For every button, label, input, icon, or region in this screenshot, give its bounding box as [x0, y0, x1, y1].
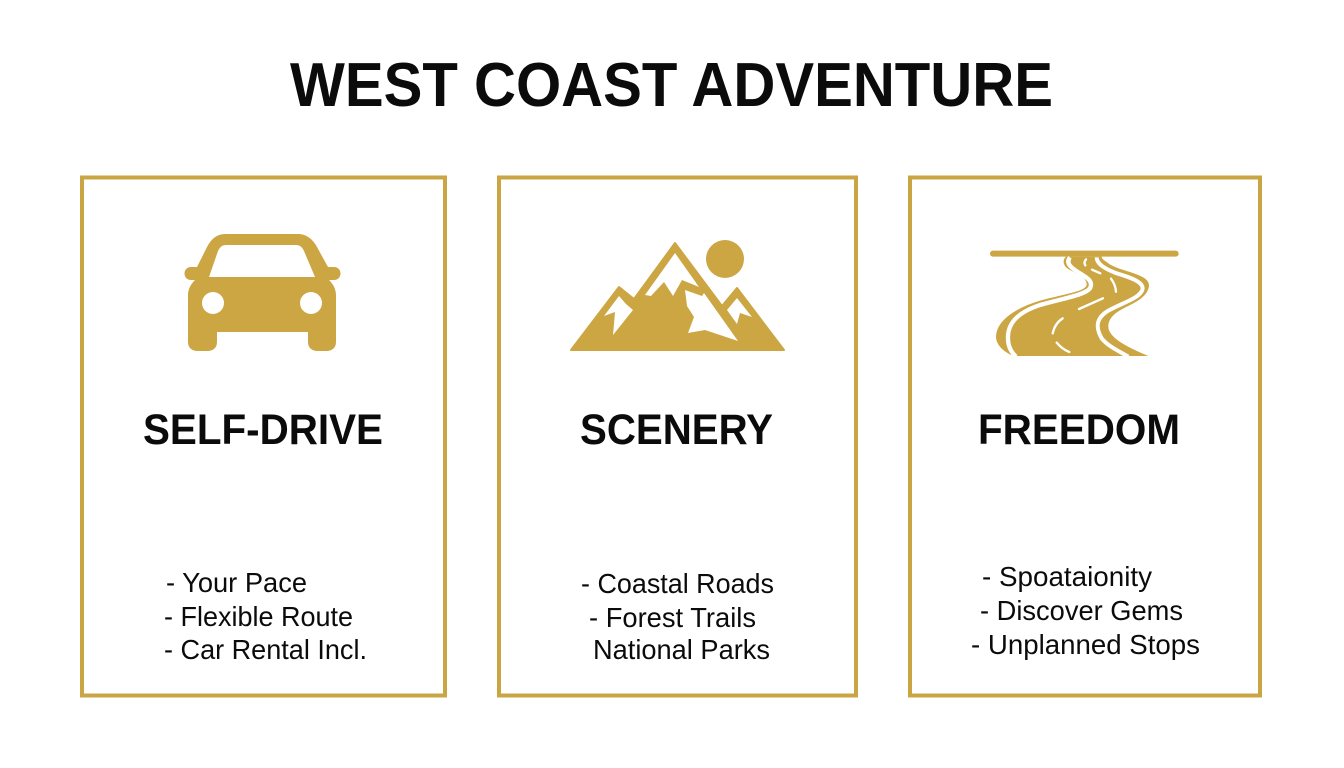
icon: winding road	[990, 251, 1179, 357]
panel: self-drive	[82, 178, 445, 696]
panel: freedom	[910, 178, 1260, 696]
list: self-drive: - Your Pace	[166, 567, 307, 598]
title: WEST COAST ADVENTURE	[290, 50, 1053, 120]
list: scenery: - Coastal Roads	[581, 568, 774, 599]
panel: scenery	[499, 178, 856, 696]
list: self-drive: - Car Rental Incl.	[164, 634, 367, 665]
list: freedom: - Discover Gems	[980, 595, 1183, 626]
list: freedom: - Spoataionity	[982, 561, 1152, 592]
list: freedom	[971, 561, 1200, 660]
heading: scenery: SCENERY	[580, 406, 773, 454]
panel border: freedom	[910, 178, 1260, 696]
list: freedom: - Unplanned Stops	[971, 629, 1200, 660]
icon: car	[184, 234, 340, 351]
panel border: self-drive	[82, 178, 445, 696]
list: scenery: National Parks	[593, 634, 770, 665]
list: scenery	[581, 568, 774, 665]
heading: freedom: FREEDOM	[978, 406, 1180, 454]
panel border: scenery	[499, 178, 856, 696]
list: self-drive: - Flexible Route	[164, 601, 353, 632]
icon: mountains and sun	[571, 240, 784, 350]
heading: self-drive: SELF-DRIVE	[143, 406, 383, 454]
list: self-drive	[164, 567, 367, 665]
list: scenery: - Forest Trails	[589, 602, 756, 633]
